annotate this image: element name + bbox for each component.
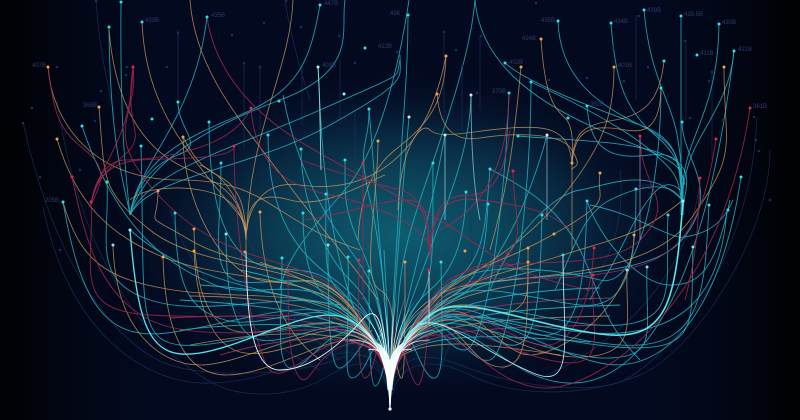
- red nodes: [70, 66, 752, 276]
- value labels: 435.5B: [684, 12, 703, 18]
- value labels: 433B: [145, 18, 159, 24]
- right upper fan, cyan: [475, 0, 685, 185]
- cyan nodes: [62, 0, 742, 272]
- bright cyan trunk curves: [130, 202, 683, 400]
- value labels: 439B: [647, 8, 661, 14]
- white convergent fan at root: [330, 290, 450, 409]
- value labels: 421B: [738, 47, 752, 53]
- dim nodes: [22, 0, 771, 251]
- value labels: 402B: [509, 60, 523, 66]
- root node: [388, 407, 392, 411]
- value labels: 407B: [32, 63, 46, 69]
- value labels: 362B: [590, 102, 604, 108]
- value labels: 205B: [45, 198, 59, 204]
- value labels: 436: [390, 11, 401, 17]
- value labels: 409B: [322, 63, 336, 69]
- loops beside the root, cyan: [369, 271, 387, 386]
- value labels: 411B: [700, 51, 714, 57]
- value labels: 424B: [522, 36, 536, 42]
- value labels: 370B: [492, 89, 506, 95]
- value labels: 430B: [722, 20, 736, 26]
- value labels: 435B: [211, 13, 225, 19]
- root cusp: [376, 342, 404, 409]
- orange nodes: [46, 38, 726, 264]
- value labels: 422B: [378, 44, 392, 50]
- right bowl, cyan: [390, 177, 741, 409]
- value labels: 447B: [324, 1, 338, 7]
- value labels: 217B: [638, 185, 652, 191]
- value labels: [32, 1, 767, 204]
- value labels: 368B: [83, 103, 97, 109]
- value labels: 401B: [618, 63, 632, 69]
- value labels: 435B: [541, 18, 555, 24]
- value labels: 434B: [614, 19, 628, 25]
- value labels: 361B: [753, 104, 767, 110]
- white curves: [246, 67, 640, 390]
- horizontal band curves radiating from the fan: [170, 262, 620, 358]
- left upper fan, cyan: [130, 5, 320, 215]
